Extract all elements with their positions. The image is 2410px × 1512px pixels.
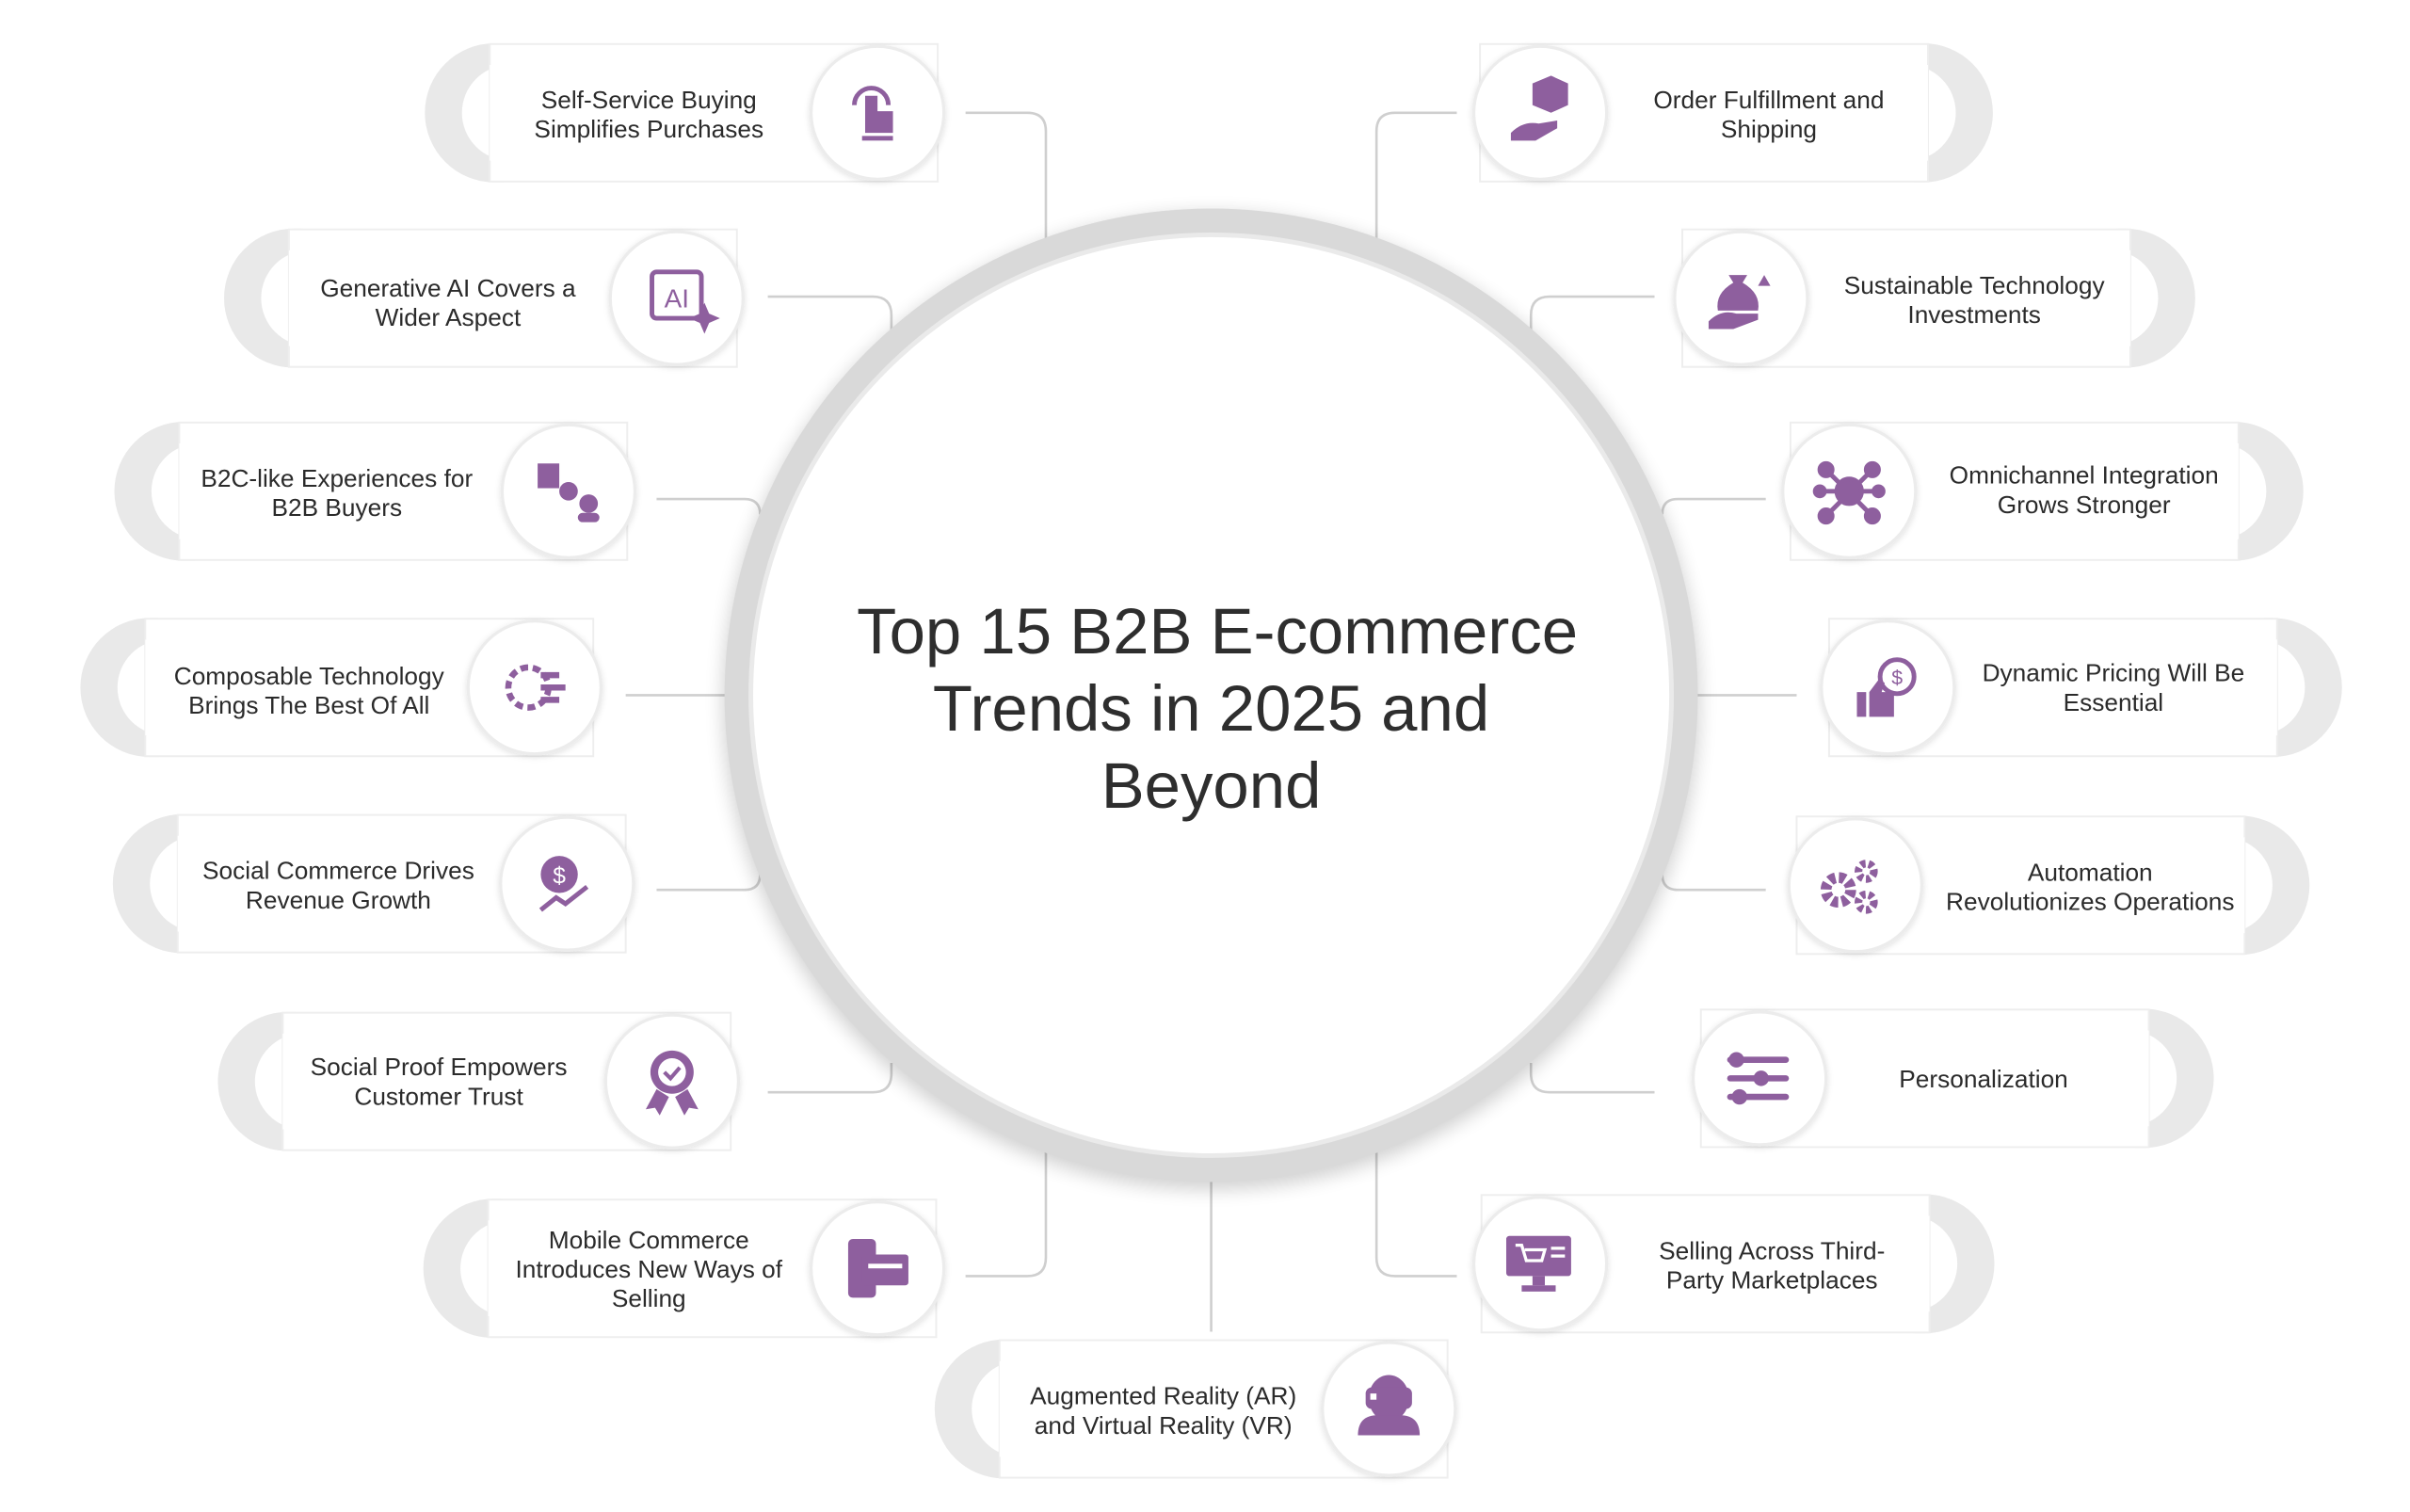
item: Sustainable Technology: Sustainable Technology	[1844, 271, 2105, 299]
icon: money bag	[1709, 275, 1771, 330]
icon: mobile wallet	[848, 1239, 908, 1297]
item: Self-Service Buying: Simplifies Purchases	[534, 115, 763, 143]
item: Mobile Commerce	[424, 1198, 944, 1338]
title: Trends in 2025 and	[933, 672, 1489, 745]
item: Personalization	[1694, 1009, 2214, 1148]
icon: thumb dollar	[1856, 660, 1914, 716]
item: Dynamic Pricing	[1822, 618, 2342, 757]
icon: thumb dollar: $	[1891, 667, 1903, 689]
item: Self-Service Buying	[425, 43, 944, 183]
icon: AI: AI	[665, 284, 689, 314]
item: Social Commerce: Social Commerce Drives	[202, 857, 474, 885]
item: Selling Across Marketplaces: Party Marketplaces	[1666, 1266, 1878, 1295]
title	[857, 595, 1578, 822]
connector lines	[626, 113, 1796, 1332]
item: Social Commerce: Revenue Growth	[246, 886, 431, 914]
icon: dollar growth: $	[553, 864, 566, 890]
item: Dynamic Pricing: Dynamic Pricing Will Be	[1983, 659, 2244, 687]
item: Social Proof: Customer Trust	[354, 1082, 524, 1110]
item: Generative AI: Generative AI Covers a	[320, 274, 576, 302]
icon: gears	[1826, 863, 1874, 910]
icon: tap hand	[855, 88, 893, 140]
icon: monitor cart	[1506, 1236, 1571, 1292]
icon: badge	[646, 1051, 699, 1116]
title: Beyond	[1101, 749, 1321, 822]
item: Selling Across Marketplaces	[1474, 1194, 1995, 1333]
item: Composable Technology	[80, 618, 601, 757]
item: Generative AI: Wider Aspect	[376, 303, 522, 331]
item: Composable Technology: Brings The Best Of All	[188, 691, 429, 719]
icon: gear circuit	[508, 668, 566, 708]
icon: network	[1815, 463, 1883, 523]
item: B2C-like Experiences	[114, 422, 635, 561]
icon: box in hand	[1511, 75, 1568, 140]
icon: buildings exchange	[538, 463, 600, 523]
item: Self-Service Buying: Self-Service Buying	[541, 86, 757, 114]
item: Sustainable Technology	[1675, 229, 2195, 368]
item: Social Proof: Social Proof Empowers	[311, 1053, 568, 1081]
item: Sustainable Technology: Investments	[1907, 300, 2041, 329]
item: Mobile Commerce: Introduces New Ways of	[515, 1255, 783, 1283]
item: AR VR	[935, 1340, 1455, 1478]
item: Social Proof	[217, 1012, 738, 1151]
item: B2C-like Experiences: B2B Buyers	[271, 493, 402, 522]
item: Dynamic Pricing: Essential	[2064, 688, 2163, 716]
item: Mobile Commerce: Mobile Commerce	[549, 1226, 749, 1254]
item: Order Fulfillment: Order Fulfillment and	[1653, 86, 1885, 114]
item: AR VR: Augmented Reality (AR)	[1030, 1382, 1296, 1410]
item: Generative AI	[224, 229, 743, 368]
icon: dollar growth	[540, 856, 587, 910]
title: Top 15 B2B E-commerce	[857, 595, 1578, 668]
central circle	[723, 209, 1699, 1190]
item: Omnichannel: Omnichannel Integration	[1950, 461, 2219, 490]
item: Mobile Commerce: Selling	[612, 1284, 686, 1312]
item: AR VR: and Virtual Reality (VR)	[1035, 1411, 1293, 1440]
icon: sliders	[1727, 1052, 1789, 1104]
item: Order Fulfillment	[1474, 43, 1993, 183]
item: Omnichannel	[1783, 422, 2304, 561]
item: Automation: Revolutionizes Operations	[1946, 888, 2234, 916]
item: Omnichannel: Grows Stronger	[1998, 491, 2171, 519]
icon: AI	[652, 272, 720, 333]
item: Personalization: Personalization	[1899, 1065, 2068, 1093]
icon: VR person	[1358, 1375, 1420, 1435]
item: Order Fulfillment: Shipping	[1721, 115, 1817, 143]
item: Automation: Automation	[2028, 858, 2153, 886]
item: Composable Technology: Composable Technology	[174, 662, 445, 690]
item: B2C-like Experiences: B2C-like Experiences for	[201, 464, 473, 492]
item: Social Commerce	[113, 814, 634, 953]
item: Automation	[1789, 815, 2309, 955]
item: Selling Across Marketplaces: Selling Across Third-	[1659, 1236, 1885, 1264]
